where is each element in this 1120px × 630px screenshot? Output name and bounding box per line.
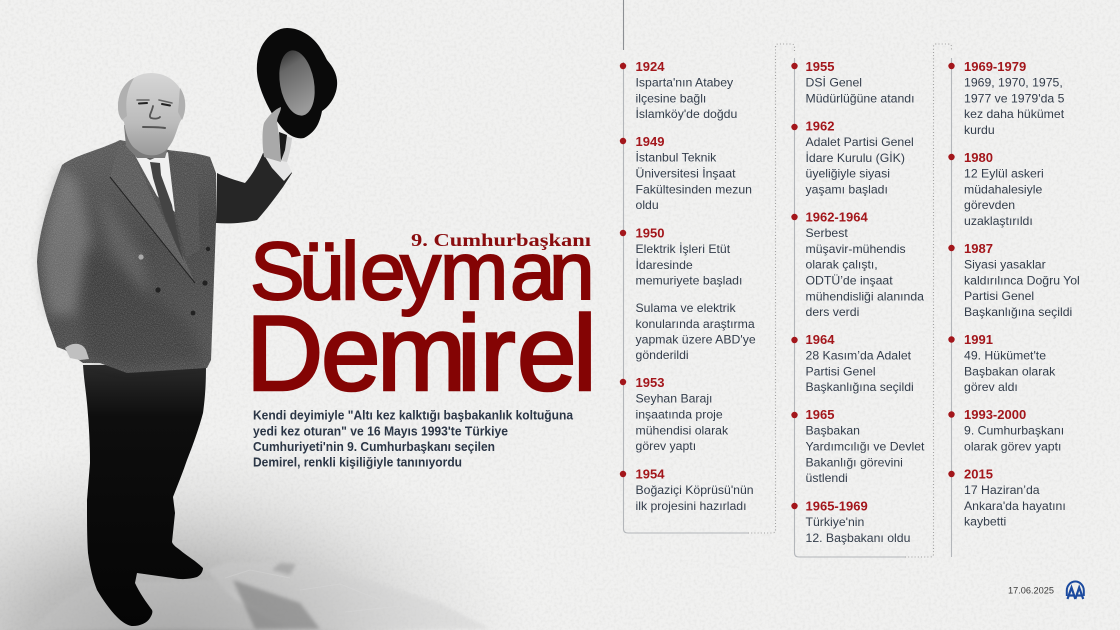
event 1949: İstanbul Teknik	[636, 150, 717, 164]
event 1987: kaldırılınca Doğru Yol	[964, 274, 1080, 288]
jacket body	[37, 140, 216, 373]
face features	[137, 100, 172, 128]
event 1962-1964: müşavir-mühendis	[806, 242, 906, 256]
event 1964: 1964	[806, 332, 835, 347]
event 1991	[948, 332, 1056, 394]
event 1962: 1962	[806, 118, 834, 134]
event 1924	[620, 59, 737, 121]
hat inner band	[275, 48, 319, 118]
intro text: Cumhuriyeti'nin 9. Cumhurbaşkanı seçilen	[253, 440, 495, 454]
event 1965: 1965	[806, 407, 834, 422]
timeline frame: column 1	[624, 0, 794, 533]
event 1980: 1980	[964, 150, 993, 165]
event 1987: 1987	[964, 241, 993, 256]
event 1969-1979: 1969, 1970, 1975,	[964, 76, 1063, 90]
neck shadow	[124, 125, 170, 158]
event 1949	[620, 134, 752, 212]
hand in pocket	[65, 344, 89, 360]
jacket with grain	[37, 140, 216, 373]
event 2015: Ankara'da hayatını	[964, 499, 1066, 513]
event 1965: Başbakan	[806, 424, 860, 438]
subtitle: 9. Cumhurbaşkanı	[411, 230, 591, 250]
event 1991: Başbakan olarak	[964, 364, 1056, 378]
event 1991: 1991	[964, 332, 993, 347]
event 1950 continued: konularında araştırma	[636, 317, 755, 331]
hair	[118, 78, 185, 120]
event 1950: 1950	[636, 226, 664, 240]
event 1955: DSİ Genel	[806, 76, 862, 90]
event 1962: Adalet Partisi Genel	[806, 135, 914, 149]
shirt	[132, 150, 175, 212]
event 1953	[620, 375, 729, 453]
event 1962-1964: ders verdi	[806, 305, 859, 319]
intro text: Kendi deyimiyle "Altı kez kalktığı başbakanlık koltuğuna	[253, 408, 574, 422]
event 1962-1964	[791, 210, 924, 319]
event 1955: 1955	[806, 59, 834, 74]
raised hand	[262, 107, 281, 162]
timeline column 3	[948, 59, 1080, 528]
event 1965	[791, 407, 925, 485]
raised sleeve	[216, 153, 292, 223]
portrait of Süleyman Demirel	[37, 28, 337, 626]
event 1964: Başkanlığına seçildi	[806, 380, 914, 394]
event 1980	[948, 150, 1044, 228]
trousers	[83, 365, 206, 626]
event 1969-1979	[948, 59, 1065, 137]
event 1993-2000	[948, 407, 1064, 454]
event 1969-1979: kez daha hükümet	[964, 107, 1065, 121]
event 1987	[948, 241, 1080, 319]
event 1949: 1949	[636, 134, 664, 149]
date: 17.06.2025	[1008, 586, 1054, 596]
fog and rocks at the photo base	[0, 430, 535, 630]
intro text	[253, 408, 574, 470]
event 1949: oldu	[636, 198, 659, 212]
event 1962-1964: ODTÜ’de inşaat	[806, 274, 893, 288]
head	[118, 73, 185, 155]
timeline column 1	[620, 59, 756, 513]
event 1954: ilk projesini hazırladı	[636, 499, 746, 513]
event 1950 continued: Sulama ve elektrik	[636, 301, 736, 315]
timeline frame: column 3	[950, 58, 952, 557]
event 1980: 12 Eylül askeri	[964, 166, 1044, 180]
event 1924: ilçesine bağlı	[636, 92, 706, 106]
event 2015: 17 Haziran’da	[964, 483, 1040, 497]
event 1962: üyeliğiyle siyasi	[806, 166, 890, 180]
event 1993-2000: olarak görev yaptı	[964, 440, 1061, 454]
buttons	[138, 247, 210, 315]
lapels	[110, 140, 195, 283]
event 1924: 1924	[636, 59, 665, 74]
event 1991: 49. Hükümet'te	[964, 348, 1046, 362]
event 1950 continued: gönderildi	[636, 348, 689, 362]
event 1965-1969	[791, 498, 910, 545]
event 1950 continued: yapmak üzere ABD'ye	[636, 332, 756, 346]
title: Süleyman: Süleyman	[250, 226, 595, 317]
event 1953: inşaatında proje	[636, 408, 723, 422]
event 1969-1979: 1977 ve 1979'da 5	[964, 92, 1065, 106]
event 1965-1969: 12. Başbakanı oldu	[806, 531, 910, 545]
event 1962-1964: mühendisliği alanında	[806, 290, 924, 304]
event 1980: uzaklaştırıldı	[964, 214, 1033, 228]
jacket shading	[83, 250, 205, 368]
event 1950: Elektrik İşleri Etüt	[636, 242, 731, 256]
event 1962-1964: olarak çalıştı,	[806, 258, 878, 272]
event 2015	[948, 466, 1066, 528]
event 1953: Seyhan Barajı	[636, 392, 712, 406]
event 1950: memuriyete başladı	[636, 274, 742, 288]
left sleeve highlight	[41, 168, 90, 315]
hat ribbon over wrist	[279, 132, 287, 161]
event 1949: Üniversitesi İnşaat	[636, 166, 736, 180]
event 1993-2000: 9. Cumhurbaşkanı	[964, 424, 1064, 438]
event 1955	[791, 59, 914, 106]
event 1953: 1953	[636, 375, 664, 390]
event 1969-1979: kurdu	[964, 123, 995, 137]
event 1993-2000: 1993-2000	[964, 407, 1026, 422]
lapel line	[110, 177, 195, 283]
event 1987: Başkanlığına seçildi	[964, 305, 1072, 319]
intro text: yedi kez oturan" ve 16 Mayıs 1993'te Türkiye	[253, 424, 508, 438]
event 1987: Partisi Genel	[964, 289, 1034, 303]
event 1962	[791, 118, 914, 196]
event 1962: yaşamı başladı	[806, 182, 888, 196]
event 1950	[620, 226, 742, 288]
event 1969-1979: 1969-1979	[964, 59, 1026, 74]
event 1954: Boğaziçi Köprüsü'nün	[636, 483, 754, 497]
event 1950: İdaresinde	[636, 258, 693, 272]
event 1987: Siyasi yasaklar	[964, 258, 1046, 272]
event 1964: 28 Kasım’da Adalet	[806, 348, 912, 362]
cuff	[264, 155, 292, 181]
timeline column 2	[791, 59, 925, 545]
event 2015: kaybetti	[964, 514, 1006, 528]
event 1965-1969: Türkiye'nin	[806, 515, 865, 529]
event 1953: görev yaptı	[636, 439, 696, 453]
icon: Anadolu Agency logo	[1067, 582, 1084, 599]
title: Demirel: Demirel	[246, 293, 597, 413]
event 1949: Fakültesinden mezun	[636, 182, 752, 196]
event 1980: görevden	[964, 198, 1015, 212]
event 1964: Partisi Genel	[806, 364, 876, 378]
event 1954	[620, 466, 754, 513]
hat	[257, 28, 337, 138]
event 1962: İdare Kurulu (GİK)	[806, 151, 905, 165]
event 1980: müdahalesiyle	[964, 182, 1042, 196]
event 1950 continued	[636, 301, 756, 362]
event 1965: Bakanlığı görevini	[806, 456, 903, 470]
event 1991: görev aldı	[964, 380, 1018, 394]
event 1962-1964: 1962-1964	[806, 210, 868, 224]
event 1965: Yardımcılığı ve Devlet	[806, 440, 925, 454]
event 1965-1969: 1965-1969	[806, 498, 868, 514]
event 1964	[791, 332, 914, 394]
timeline frame: column 2	[794, 44, 952, 557]
event 2015: 2015	[964, 466, 993, 482]
wrist highlight	[282, 136, 292, 162]
event 1965: üstlendi	[806, 471, 848, 485]
event 1924: İslamköy'de doğdu	[636, 107, 737, 121]
event 1953: mühendisi olarak	[636, 424, 729, 438]
tie	[150, 162, 184, 262]
event 1954: 1954	[636, 466, 665, 482]
event 1924: Isparta'nın Atabey	[636, 76, 734, 90]
event 1962-1964: Serbest	[806, 226, 848, 240]
intro text: Demirel, renkli kişiliğiyle tanınıyordu	[253, 456, 462, 470]
chest highlight	[100, 195, 150, 300]
event 1955: Müdürlüğüne atandı	[806, 92, 914, 106]
